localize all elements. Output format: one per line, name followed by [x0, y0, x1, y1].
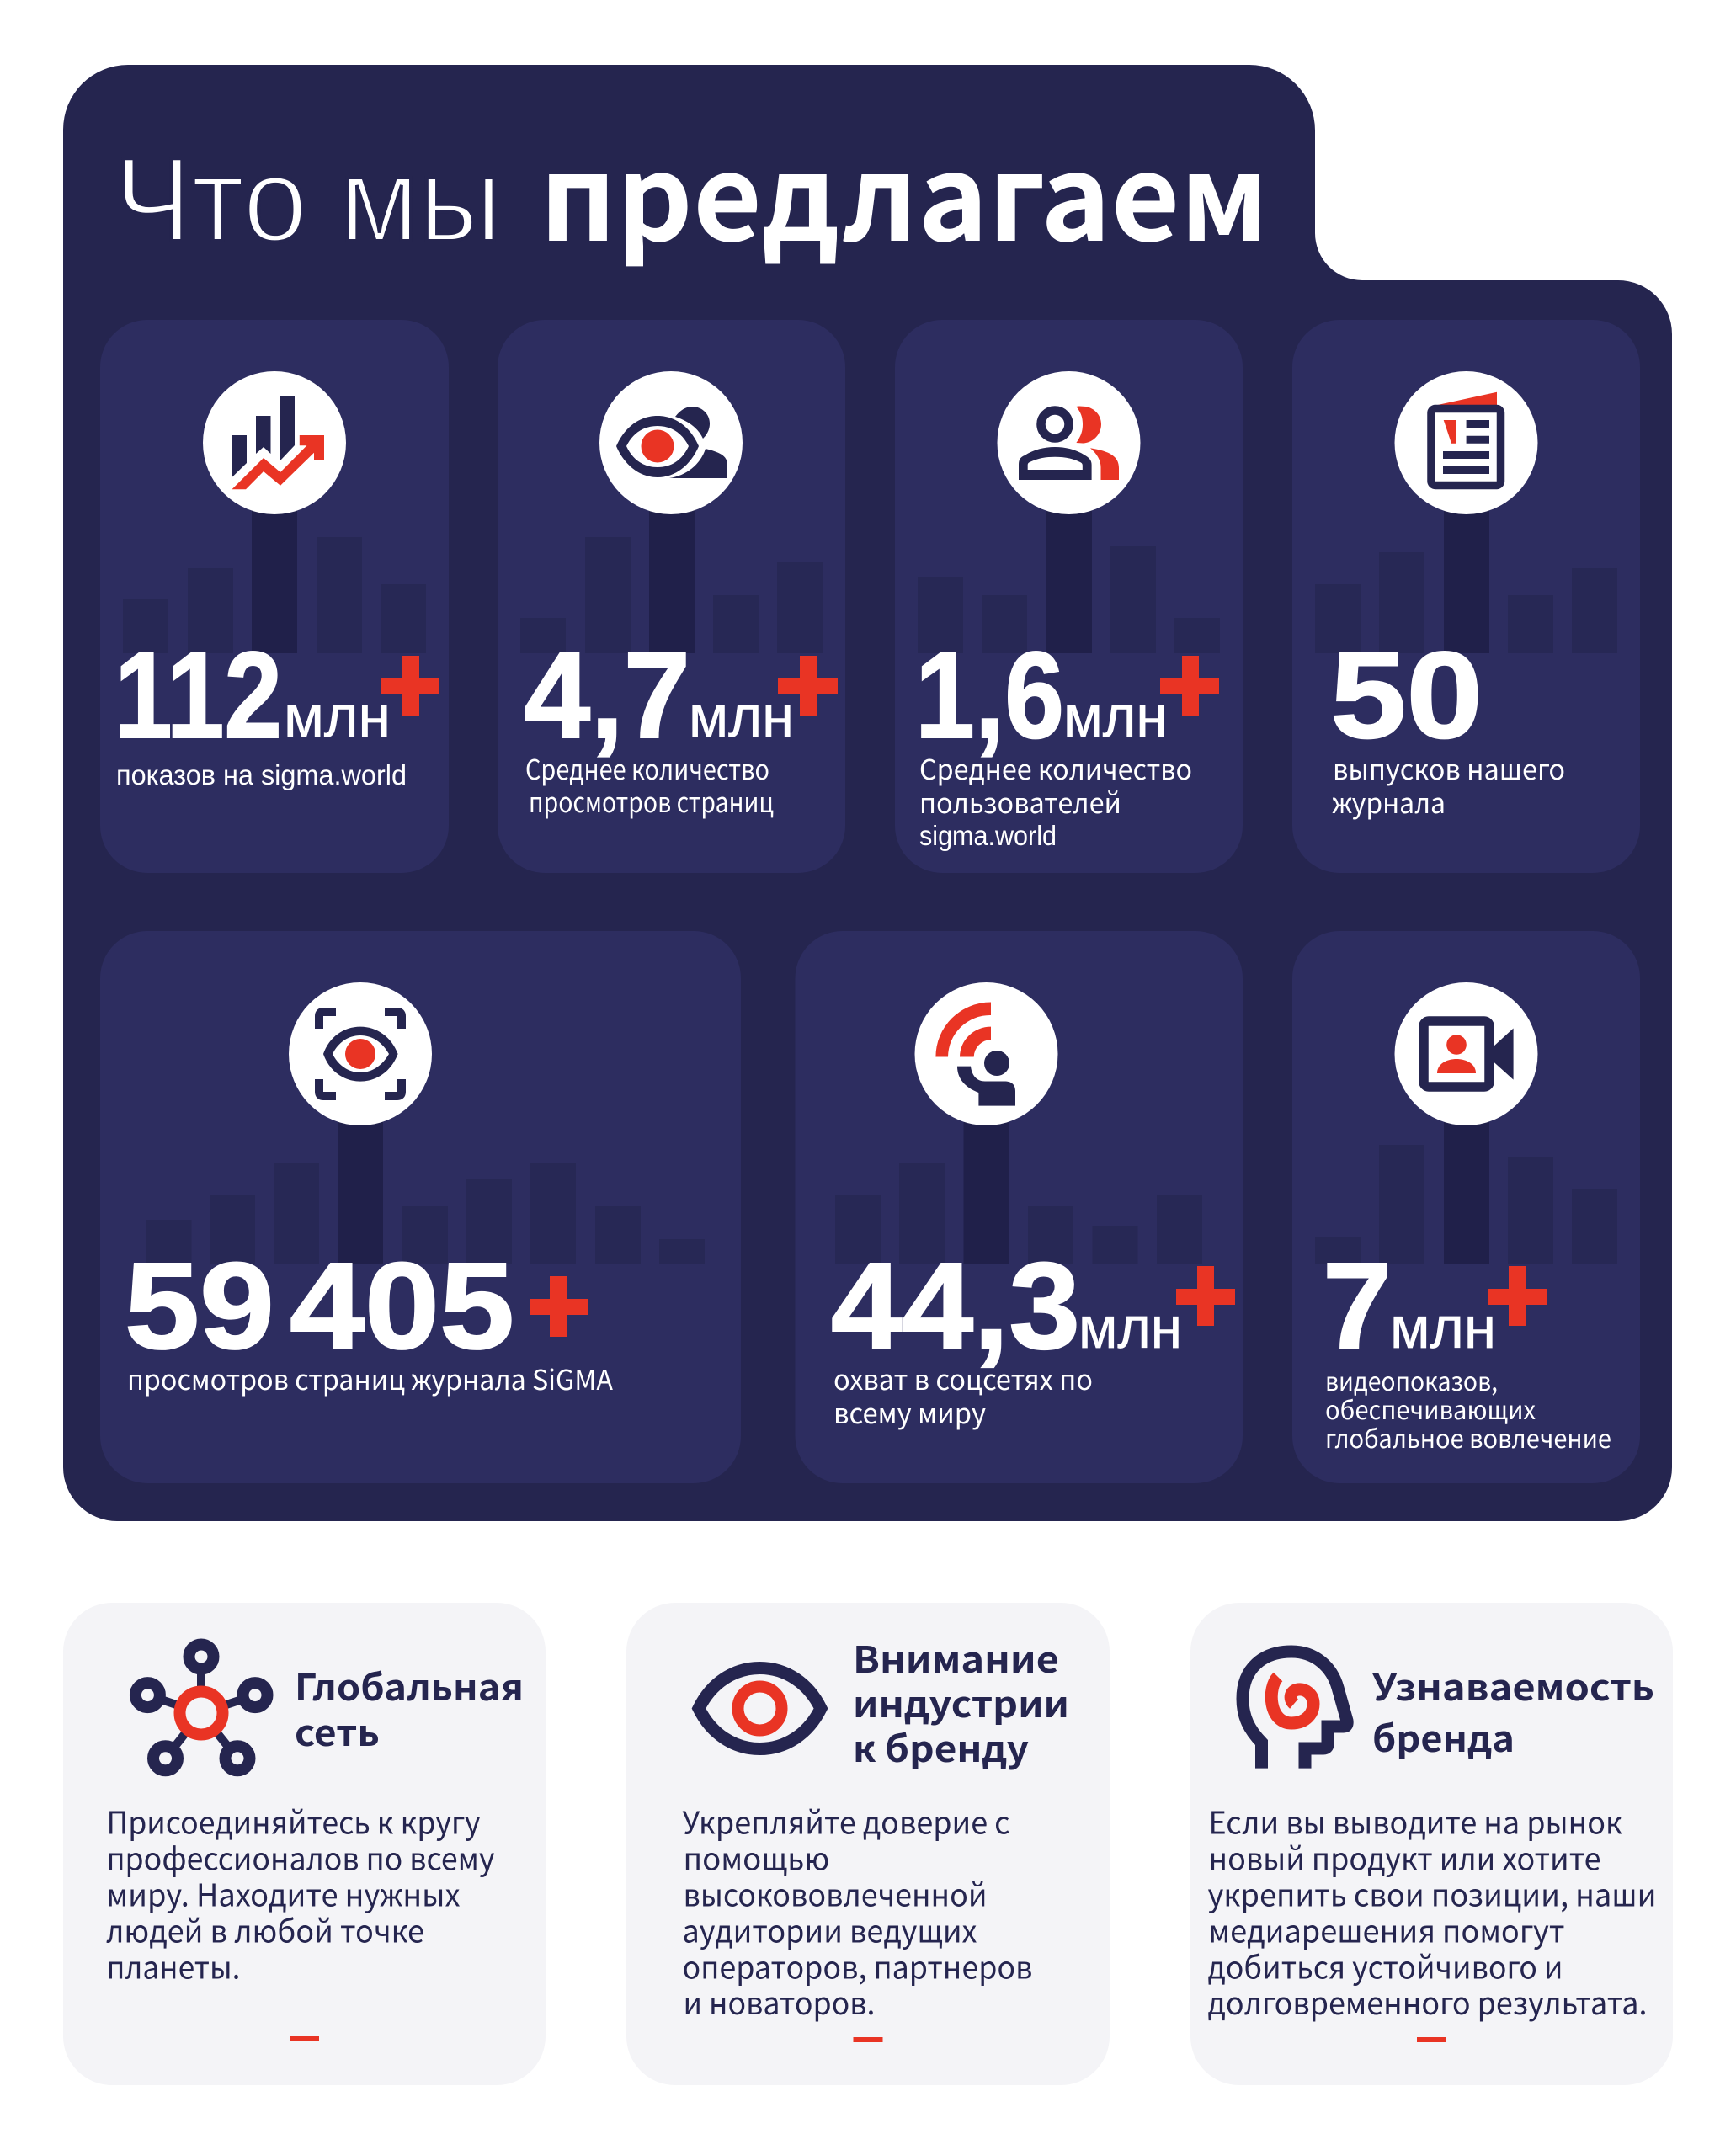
bar chart: page views backdrop: [520, 505, 823, 653]
stat value: 4,7 млн+: 4,7: [524, 626, 690, 764]
heading: [853, 1631, 1069, 1773]
stat value: 44,3 млн+: [831, 1237, 1235, 1374]
text block: помощью: [684, 1833, 830, 1879]
label: [1325, 1361, 1611, 1455]
panel: video impressions stat: [1292, 931, 1640, 1483]
panel: social reach stat: [795, 931, 1243, 1483]
text block: операторов, партнеров: [682, 1943, 1032, 1988]
text block: Присоединяйтесь к кругу: [106, 1798, 480, 1844]
heading: Внимание: [853, 1631, 1059, 1684]
stat value: 7 млн+: 7: [1323, 1237, 1392, 1374]
title: [114, 103, 1268, 275]
heading: Узнаваемость: [1372, 1659, 1654, 1711]
bar chart: social reach backdrop: [835, 1116, 1202, 1264]
panel: global network: [63, 1603, 546, 2085]
label: Среднее количество: [525, 748, 769, 788]
bar chart: journal views backdrop: [146, 1116, 705, 1264]
label: обеспечивающих: [1325, 1390, 1536, 1427]
text block: Если вы выводите на рынок: [1209, 1798, 1622, 1844]
stat value: 1,6 млн+: млн: [1063, 684, 1168, 749]
text block: медиарешения помогут: [1209, 1906, 1564, 1951]
label: выпусков нашего: [1333, 748, 1565, 788]
text block: укрепить свои позиции, наши: [1207, 1870, 1657, 1916]
stat value: 112 млн+: 112: [114, 626, 282, 764]
label: [525, 748, 774, 821]
stat value: 50: 50: [1330, 626, 1483, 764]
stat value: 1,6 млн+: [915, 626, 1219, 764]
label: Среднее количество: [919, 748, 1192, 788]
bar chart: users backdrop: [918, 505, 1220, 653]
panel: industry attention: [626, 1603, 1110, 2085]
heading: сеть: [295, 1705, 380, 1757]
text block: аудитории ведущих: [682, 1906, 977, 1951]
heading: к бренду: [853, 1721, 1029, 1773]
icon: eye: [699, 1668, 821, 1749]
stat value: 112 млн+: [114, 626, 439, 764]
text block: миру. Находите нужных: [106, 1870, 460, 1916]
text block: профессионалов по всему: [106, 1833, 495, 1879]
icon: eye and person: [599, 371, 743, 514]
icon: magazine: [1394, 371, 1537, 514]
label: показов на sigma.world: [116, 759, 407, 790]
stat value: 4,7 млн+: [524, 626, 838, 764]
text block: планеты.: [106, 1943, 241, 1988]
label: глобальное вовлечение: [1325, 1418, 1611, 1455]
stat value: 59 405+: [125, 1237, 588, 1374]
panel: SiGMA magazine page views stat: [100, 931, 741, 1483]
icon: network: [136, 1645, 268, 1770]
icon: users: [997, 371, 1140, 514]
label: sigma.world: [919, 820, 1057, 851]
heading: бренда: [1372, 1711, 1515, 1763]
label: всему миру: [833, 1391, 986, 1432]
red dash: [1417, 2037, 1446, 2042]
label: видеопоказов,: [1325, 1361, 1498, 1398]
stat value: 7 млн+: [1323, 1237, 1547, 1374]
icon: head with spiral: [1243, 1652, 1347, 1769]
red dash: [854, 2037, 882, 2042]
panel: average page views stat: [498, 320, 845, 873]
panel: average users stat: [895, 320, 1243, 873]
text block: [1207, 1798, 1657, 2024]
text block: добиться устойчивого и: [1207, 1943, 1563, 1988]
bar chart: impressions backdrop: [123, 505, 426, 653]
label: [1332, 748, 1565, 822]
text block: долговременного результата.: [1207, 1978, 1647, 2024]
heading: индустрии: [853, 1676, 1069, 1728]
heading: Глобальная: [295, 1659, 524, 1711]
panel: impressions stat: [100, 320, 449, 873]
label: [833, 1358, 1093, 1432]
main dark panel: [63, 65, 1672, 1521]
label: просмотров страниц: [529, 780, 774, 821]
title: предлагаем: [540, 103, 1268, 275]
text block: Укрепляйте доверие с: [682, 1798, 1010, 1844]
stat value: 4,7 млн+: млн: [689, 684, 794, 749]
icon: growth chart: [203, 371, 346, 514]
heading: [295, 1659, 524, 1757]
icon: video camera: [1394, 982, 1537, 1125]
bar chart: video backdrop: [1315, 1116, 1617, 1264]
red dash: [290, 2036, 319, 2041]
heading: [1372, 1659, 1654, 1763]
stat value: 1,6 млн+: 1,6: [915, 626, 1064, 764]
icon: focus eye: [289, 982, 432, 1125]
text block: высокововлеченной: [684, 1870, 987, 1916]
label: журнала: [1332, 781, 1446, 822]
text block: [106, 1798, 495, 1988]
stat value: 44,3 млн+: млн: [1078, 1295, 1182, 1360]
panel: brand awareness: [1190, 1603, 1673, 2085]
stat value: 112 млн+: млн: [284, 684, 391, 749]
label: охват в соцсетях по: [833, 1358, 1093, 1398]
label: просмотров страниц журнала SiGMA: [127, 1358, 613, 1398]
bar chart: issues backdrop: [1315, 505, 1617, 653]
text block: новый продукт или хотите: [1209, 1833, 1601, 1879]
text block: людей в любой точке: [106, 1906, 424, 1951]
stat value: 59 405+: 405: [290, 1237, 514, 1374]
stat value: 7 млн+: млн: [1390, 1295, 1496, 1360]
text block: и новаторов.: [684, 1978, 876, 2024]
label: [919, 748, 1192, 851]
stat value: 44,3 млн+: 44,3: [831, 1237, 1080, 1374]
stat value: 59 405+: 59: [125, 1237, 274, 1374]
label: пользователей: [919, 781, 1121, 822]
panel: magazine issues stat: [1292, 320, 1640, 873]
icon: broadcast person: [914, 982, 1057, 1125]
title: Что мы: [114, 133, 502, 267]
text block: [682, 1798, 1032, 2024]
